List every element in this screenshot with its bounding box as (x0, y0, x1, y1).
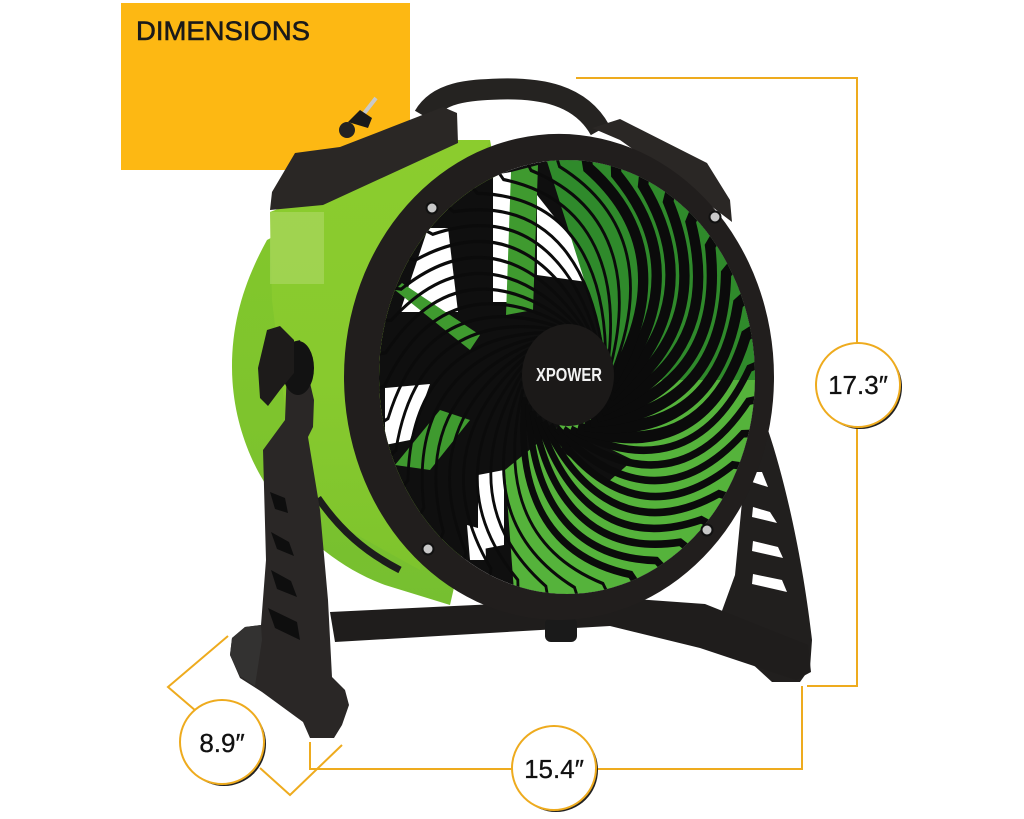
width callout (512, 726, 598, 812)
ring screws (422, 202, 720, 554)
brand logo: XPOWER (536, 365, 602, 385)
title: dimensions: DIMENSIONS (136, 16, 310, 46)
green upper-right area (547, 160, 755, 398)
fan green body (232, 140, 520, 605)
fan opening contents (379, 160, 755, 594)
green lower-right area (505, 380, 755, 594)
depth value: 8.9″ (199, 728, 245, 758)
dimension lines (168, 78, 857, 795)
white background gaps (385, 172, 590, 560)
left control housing (270, 107, 458, 210)
depth callout (180, 700, 266, 786)
height value: 17.3″ (828, 370, 888, 400)
infographic canvas (121, 3, 902, 812)
body lighter housing (270, 140, 490, 570)
spiral grill ribs (379, 160, 755, 594)
hub shadow strut (562, 441, 632, 480)
dark band on body (318, 498, 400, 570)
title panel (121, 3, 410, 170)
foot tube end (230, 625, 262, 686)
height callout (816, 343, 902, 429)
right control housing (592, 119, 732, 222)
width value: 15.4″ (524, 754, 584, 784)
leg slots (752, 472, 787, 592)
power switch (339, 98, 376, 138)
fan product illustration (230, 89, 812, 738)
base bar (330, 598, 811, 680)
height line (576, 78, 857, 686)
right support leg (715, 430, 812, 682)
fan hub with logo (522, 324, 614, 426)
depth line (168, 636, 342, 795)
outer fan ring (344, 134, 774, 620)
bearing hub (282, 341, 314, 395)
green rear supports (395, 165, 538, 470)
fan handle (424, 89, 600, 130)
left support leg (230, 326, 349, 738)
leg windows (268, 492, 300, 640)
width line (310, 686, 802, 769)
adjustment knob (258, 326, 294, 406)
base foot (545, 618, 577, 642)
specification label (270, 212, 324, 284)
